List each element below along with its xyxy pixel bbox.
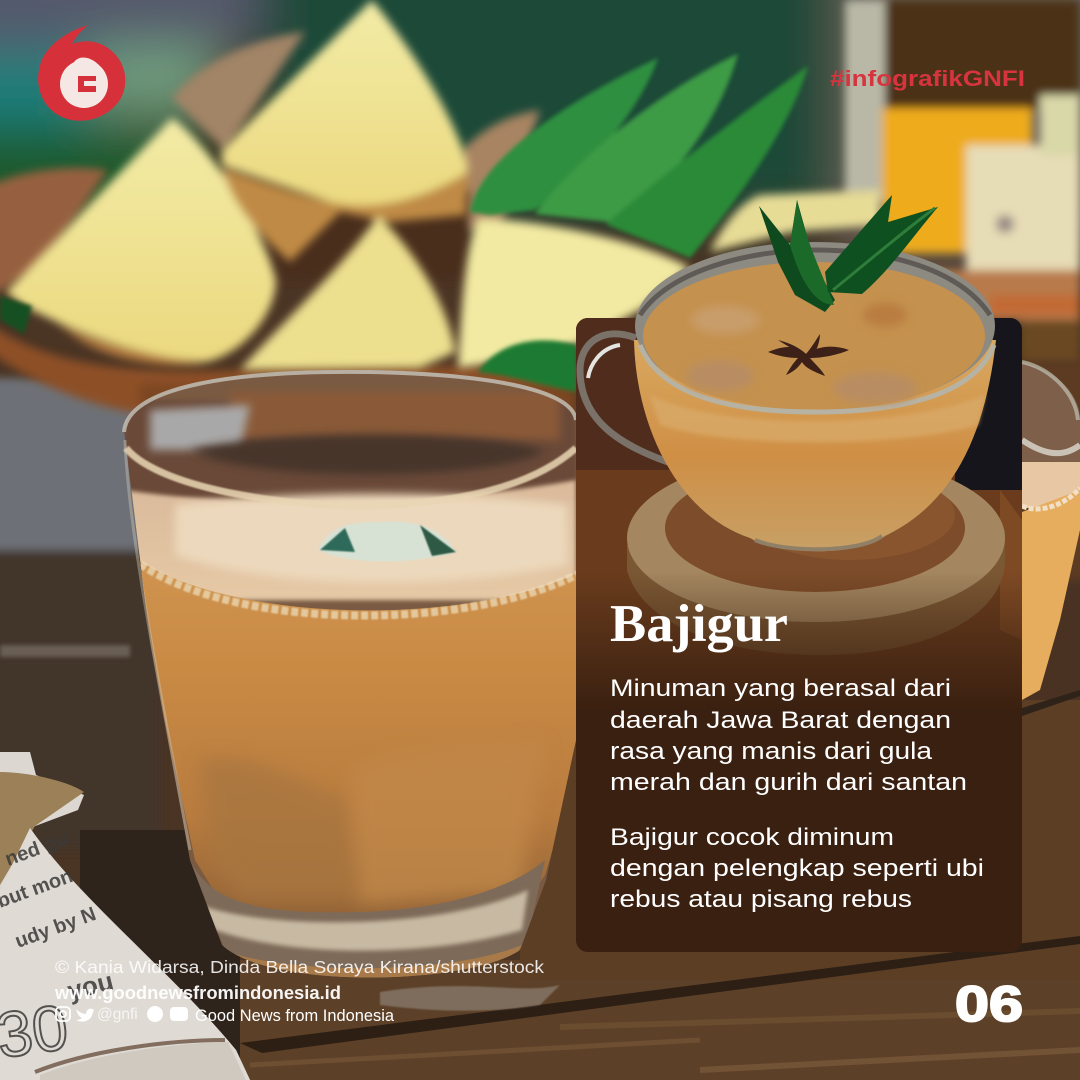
text block: description: Minuman yang berasal dari	[610, 675, 951, 702]
main glass of bajigur	[120, 360, 580, 1000]
glass base	[190, 860, 545, 981]
text block: serving suggestion: dengan pelengkap seperti ubi	[610, 855, 984, 882]
drink body	[138, 560, 580, 925]
text block: description: merah dan gurih dari santan	[610, 769, 967, 796]
glass rim highlights	[124, 372, 576, 432]
cloth with printed newspaper text: you	[64, 966, 116, 1006]
bajigur cup	[634, 242, 996, 551]
facets of lower glass	[200, 757, 346, 894]
view through rim	[124, 400, 576, 500]
icon: youtube	[170, 1007, 188, 1021]
text block: description	[610, 675, 967, 796]
text block: serving suggestion	[610, 824, 984, 913]
photo credit: © Kania Widarsa, Dinda Bella Soraya Kirana/shutterstock	[55, 957, 544, 977]
small drinking glass on the right edge	[1022, 362, 1080, 700]
hashtag: #infografikGNFI	[830, 66, 1025, 91]
glass cup handle	[580, 334, 668, 462]
ice cube	[318, 522, 456, 562]
foam	[124, 480, 576, 600]
wooden coaster	[627, 454, 1005, 655]
icon: instagram	[56, 1007, 70, 1021]
table top grey and dark wood on the left	[0, 365, 1080, 580]
icon: facebook	[147, 1006, 163, 1022]
cloth with printed newspaper text	[0, 752, 250, 1080]
panel fade to brown	[576, 318, 1022, 952]
cloth with printed newspaper text: udy by N	[12, 903, 99, 953]
website: www.goodnewsfromindonesia.id	[54, 983, 341, 1003]
wooden table planks	[80, 690, 1080, 1080]
panel photo: cup of bajigur on wooden coaster	[576, 318, 1022, 688]
bottle and label in the background	[845, 0, 1080, 365]
panel: bajigur description card	[576, 195, 1022, 952]
pineapple pieces	[6, 0, 880, 370]
text block: description: rasa yang manis dari gula	[610, 738, 932, 765]
icon: GNFI logo	[38, 25, 125, 121]
text block: serving suggestion: rebus atau pisang rebus	[610, 886, 912, 913]
basket of pineapple	[0, 32, 575, 440]
cloth with printed newspaper text: ned gu	[2, 828, 71, 871]
social name: Good News from Indonesia	[195, 1007, 395, 1025]
footer credits	[54, 957, 544, 1025]
page number: 06	[955, 976, 1023, 1032]
text block: serving suggestion: Bajigur cocok diminum	[610, 824, 894, 851]
heading: Bajigur: Bajigur	[610, 595, 788, 653]
text block: description: daerah Jawa Barat dengan	[610, 707, 951, 734]
pandan leaf garnish	[759, 195, 938, 312]
blurred garden backdrop	[0, 0, 1080, 260]
star anise	[768, 334, 849, 376]
icon: twitter	[76, 1009, 94, 1022]
pandan leaves in basket	[0, 54, 808, 392]
social handle: @gnfi	[97, 1006, 138, 1023]
